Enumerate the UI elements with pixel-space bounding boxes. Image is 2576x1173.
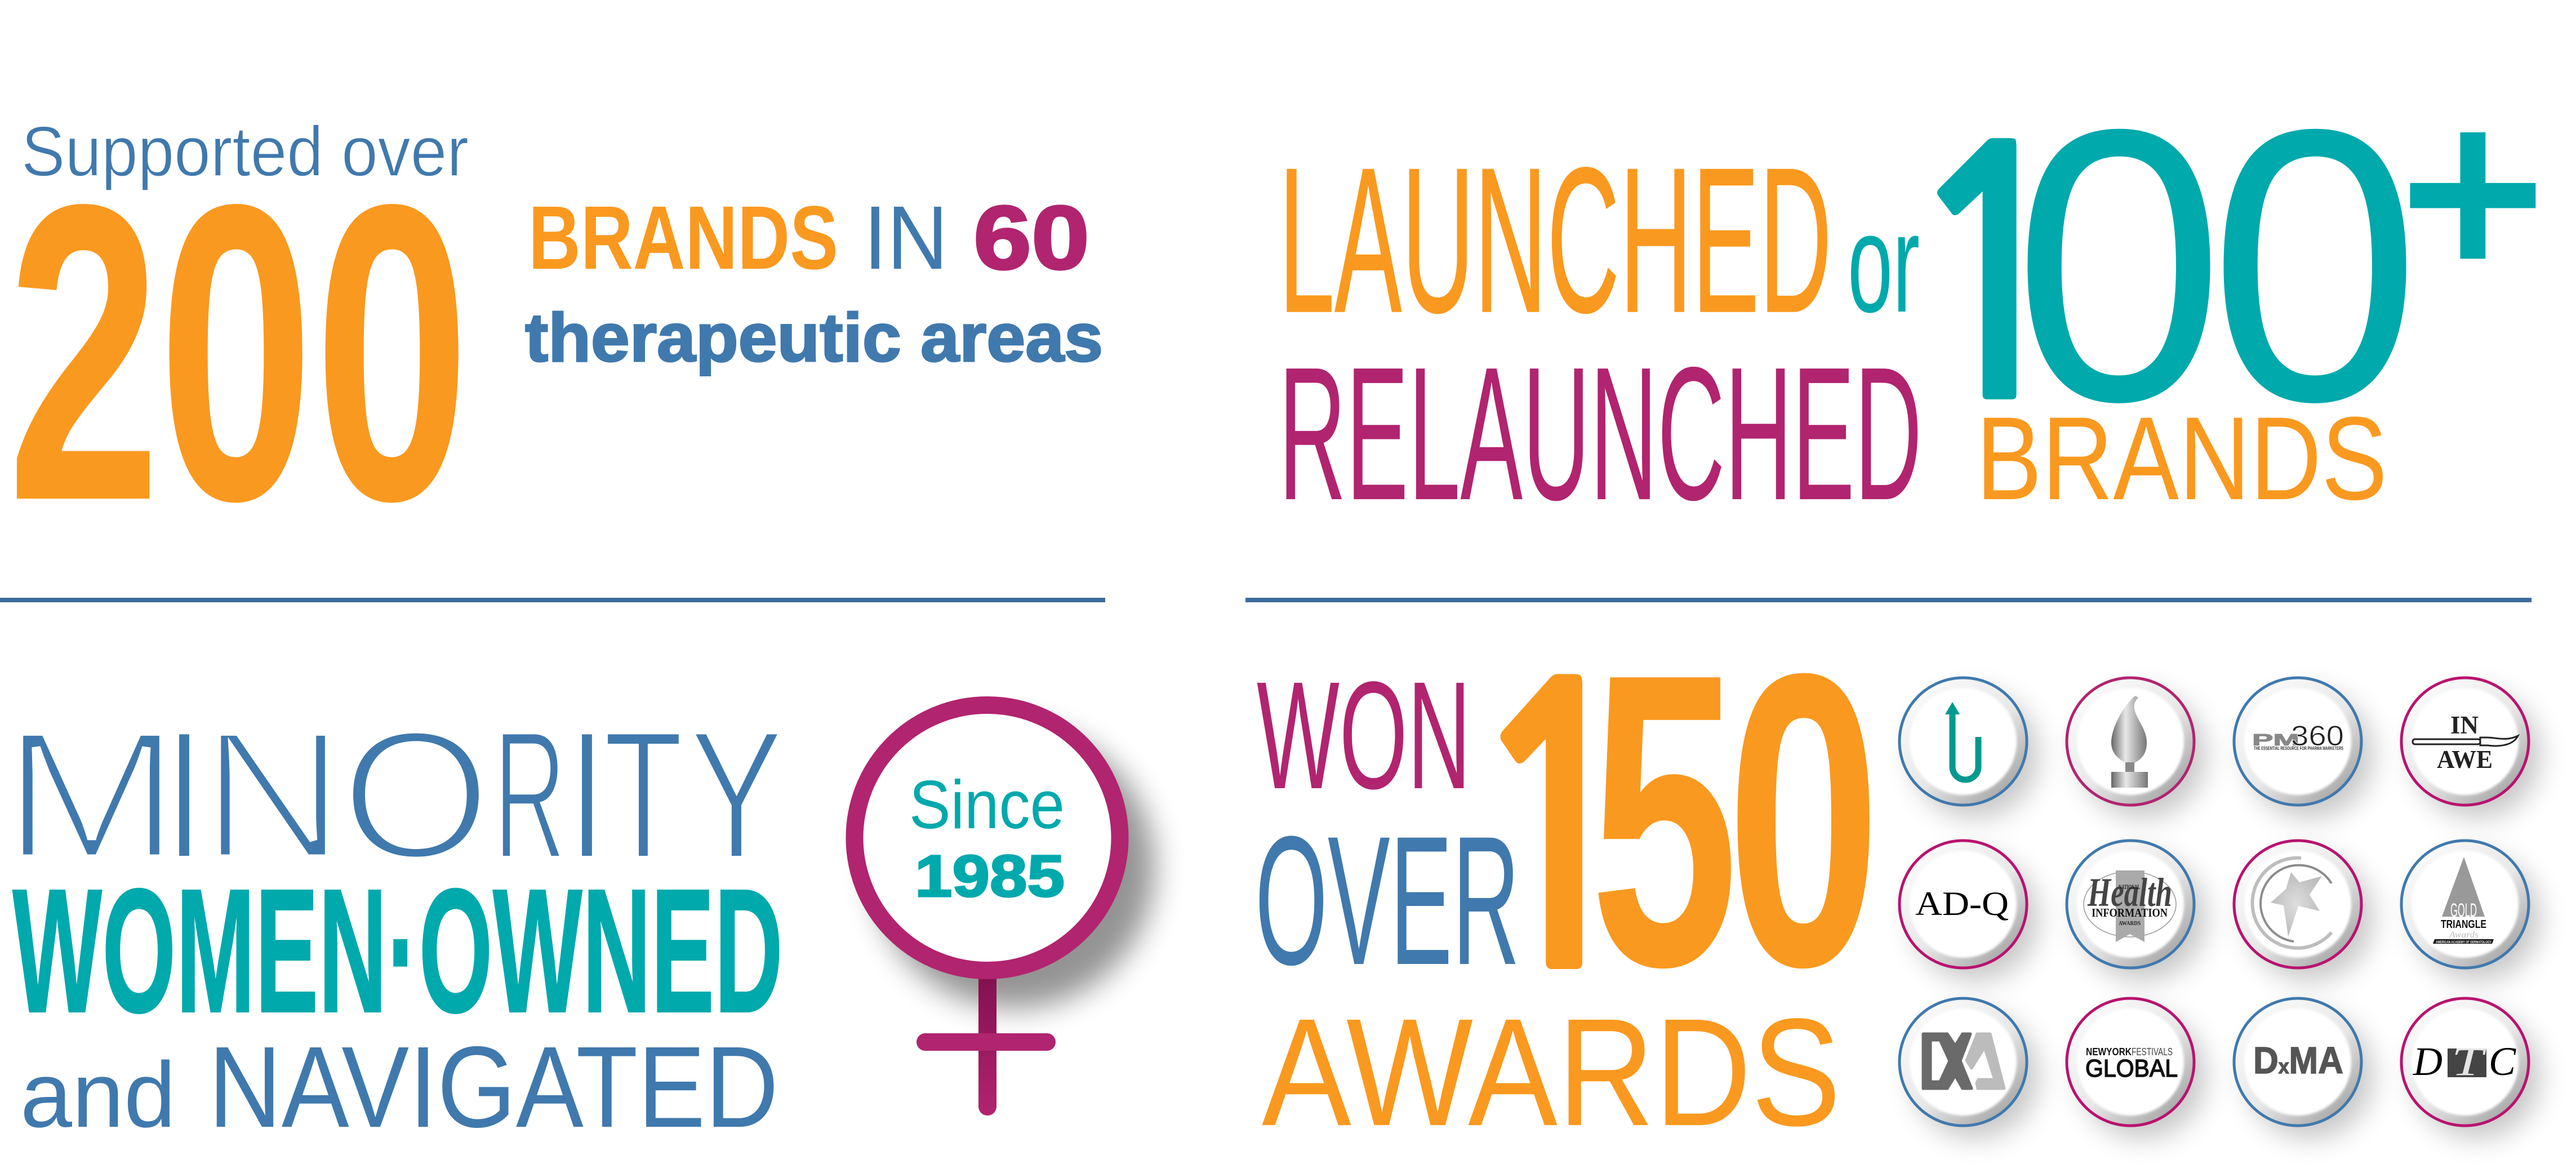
crossbar of symbol xyxy=(916,1033,1056,1051)
logo: National Health Information Awards xyxy=(2084,870,2176,942)
logo: U arrow xyxy=(1945,702,1978,780)
logo: Gold Triangle xyxy=(2433,857,2494,944)
divider: top left rule xyxy=(0,598,1105,602)
logo: PM360 xyxy=(2252,720,2344,752)
logo: DXA mark xyxy=(1923,1034,2004,1088)
logo: PM360: 360 xyxy=(2291,720,2344,752)
logo: In Awe: AWE xyxy=(2437,745,2493,774)
logo: Gold Triangle: GOLD xyxy=(2450,900,2477,921)
logo: Gold Triangle: Awards xyxy=(2449,930,2479,940)
text: MINORITY: O xyxy=(341,692,491,897)
ring of symbol xyxy=(855,705,1120,970)
text: LAUNCHED or xyxy=(1279,125,1920,356)
text: MINORITY: I xyxy=(567,692,607,897)
logo: In Awe xyxy=(2413,711,2518,774)
big number: 200: 0 xyxy=(314,117,470,588)
logo: In Awe: IN xyxy=(2450,711,2479,739)
logo: National Health Information Awards: Health xyxy=(2087,870,2172,915)
logo: DTC: C xyxy=(2489,1039,2516,1084)
icon: female symbol with Since 1985 xyxy=(855,705,1155,1116)
text: BRANDS IN 60: BRANDS xyxy=(528,187,838,288)
panel: 150 awards xyxy=(1255,587,1881,1158)
text: MINORITY: N xyxy=(201,692,345,897)
big number: 100+: 0 xyxy=(2209,48,2421,482)
text: OVER: OVER xyxy=(1255,798,1520,1003)
text: WON: WON xyxy=(1257,650,1471,821)
text: therapeutic areas: therapeutic areas xyxy=(525,299,1103,376)
logo: Gold Triangle: TRIANGLE xyxy=(2441,918,2486,931)
text: BRANDS IN 60: 60 xyxy=(973,187,1089,288)
text: BRANDS: BRANDS xyxy=(1976,392,2387,525)
big number: 150: 5 xyxy=(1590,587,1738,1054)
text: MINORITY: R xyxy=(493,692,566,897)
panel: minority women-owned xyxy=(1,692,784,1152)
text: MINORITY: T xyxy=(603,692,683,897)
big number: 150: 0 xyxy=(1727,587,1881,1054)
logo: AD-Q: AD-Q xyxy=(1915,885,2009,922)
big number: 100+: 0 xyxy=(2013,48,2225,482)
panel: 200 brands xyxy=(7,113,1103,588)
panel: 100+ brands xyxy=(1279,48,2544,540)
text: WOMEN-OWNED: WOMEN·OWNED xyxy=(12,852,783,1050)
big number: 200: 2 xyxy=(7,117,161,588)
logo: DxMA: DxMA xyxy=(2253,1039,2343,1082)
panel: 100+ brands: RELAUNCHED xyxy=(1279,328,1922,540)
big number: 200 xyxy=(7,117,470,588)
logo: New York Festivals Global: FESTIVALS xyxy=(2132,1046,2173,1058)
badge discs xyxy=(1899,678,2529,1126)
logo: PM360: PM xyxy=(2252,731,2299,749)
logo: National Health Information Awards: NATIONAL xyxy=(2119,883,2140,891)
text: MINORITY: M xyxy=(1,692,181,897)
logo: DTC: T xyxy=(2452,1039,2487,1084)
text: MINORITY: Y xyxy=(689,692,784,897)
badge inner white faces xyxy=(1910,688,2519,1116)
divider: top right rule xyxy=(1245,598,2531,602)
stem of symbol xyxy=(978,975,996,1116)
logo: New York Festivals Global: NEWYORK xyxy=(2086,1046,2132,1058)
text: MINORITY: I xyxy=(164,692,204,897)
text: Supported over: Supported over xyxy=(21,113,469,191)
big number: 150: 1 xyxy=(1461,644,1653,1024)
big number: 100+: + xyxy=(2402,57,2544,328)
logo: flame trophy xyxy=(2111,696,2148,788)
text: LAUNCHED or: or xyxy=(1848,184,1920,341)
big number: 100+: 1 xyxy=(1897,109,2088,450)
text: BRANDS IN 60: IN xyxy=(864,187,948,288)
logo: National Health Information Awards: AWARDS xyxy=(2119,920,2141,927)
badge grid: award logos xyxy=(1899,678,2541,1139)
text: 1985: 1985 xyxy=(915,843,1065,909)
big number: 200: 0 xyxy=(158,117,314,588)
logo: PM360: THE ESSENTIAL RESOURCE FOR PHARMA MARKETERS xyxy=(2254,745,2343,751)
logo: DTC: D xyxy=(2413,1039,2442,1084)
text: BRANDS IN 60 xyxy=(528,187,1089,288)
text: and NAVIGATED: and xyxy=(20,1043,176,1147)
text: and NAVIGATED xyxy=(20,1023,778,1152)
logo: National Health Information Awards: INFORMATION xyxy=(2092,906,2168,919)
big number: 150 xyxy=(1461,587,1881,1054)
big number: 100+ xyxy=(1897,48,2544,482)
text: Since: Since xyxy=(909,766,1065,843)
badge shadows xyxy=(1912,692,2541,1139)
text: and NAVIGATED: NAVIGATED xyxy=(208,1023,778,1152)
logo: Gold Triangle: AMERICAN ACADEMY OF DERMATOLOGY xyxy=(2436,940,2492,944)
text: AWARDS: AWARDS xyxy=(1262,987,1841,1158)
logo: DTC xyxy=(2413,1039,2516,1084)
logo: star with arcs xyxy=(2252,858,2332,948)
logo: New York Festivals Global: GLOBAL xyxy=(2085,1055,2178,1082)
text: LAUNCHED or: LAUNCHED xyxy=(1279,125,1832,356)
